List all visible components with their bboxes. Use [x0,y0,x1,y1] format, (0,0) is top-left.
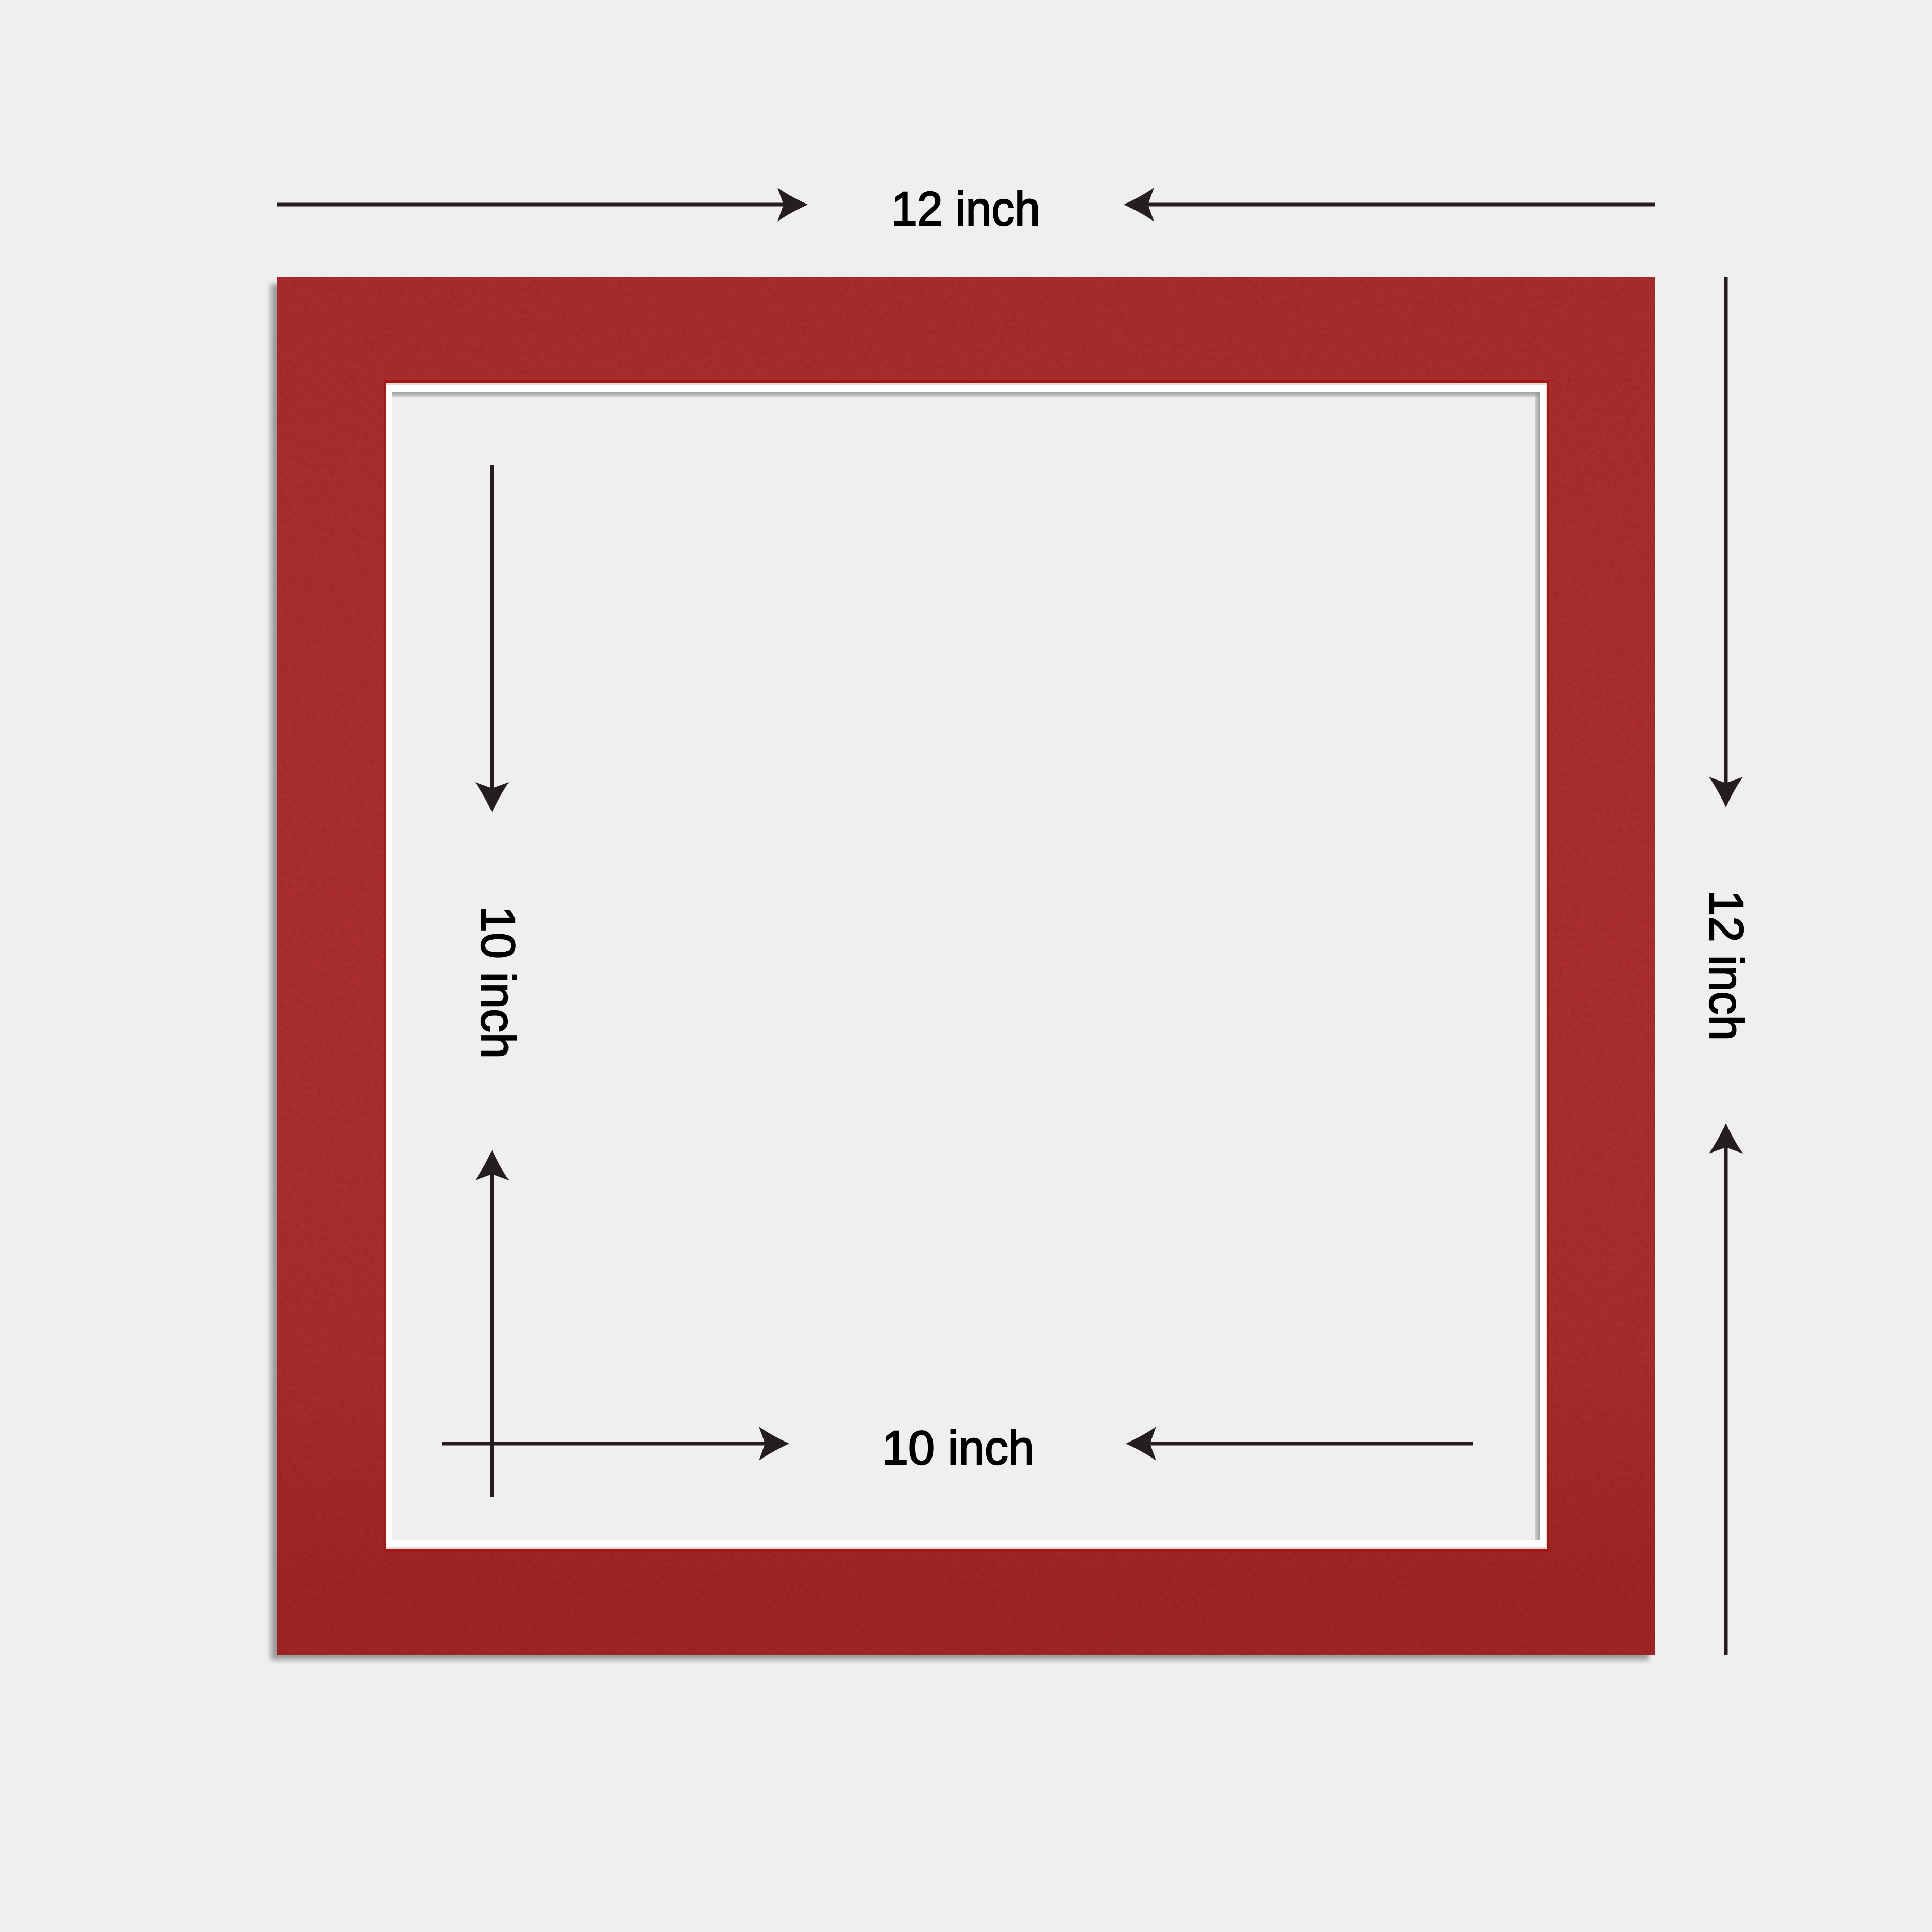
arrow: inner bottom right pointing left [1126,1427,1473,1461]
arrow: top left pointing right [277,188,808,222]
label: top 12 inch: 12 inch [891,182,1040,235]
arrow: inner left lower pointing up [475,1150,509,1497]
arrow: top right pointing left [1124,188,1655,222]
mat paper texture [277,277,1655,1655]
arrow: inner bottom left pointing right [442,1427,789,1461]
mat drop shadow [271,284,1649,1660]
label: inner bottom 10 inch: 10 inch [882,1421,1035,1475]
label: right 12 inch: 12 inch [1700,890,1753,1041]
arrow: inner left upper pointing down [475,465,509,812]
mat opening [376,376,1557,1556]
label: inner left 10 inch: 10 inch [471,906,525,1059]
panel: red mat board [271,277,1655,1660]
mat surface [277,277,1655,1655]
infographic canvas [268,188,1745,1663]
arrow: right lower pointing up [1709,1123,1743,1655]
mat opening bevel [384,380,1549,1552]
arrow: right upper pointing down [1709,277,1743,807]
